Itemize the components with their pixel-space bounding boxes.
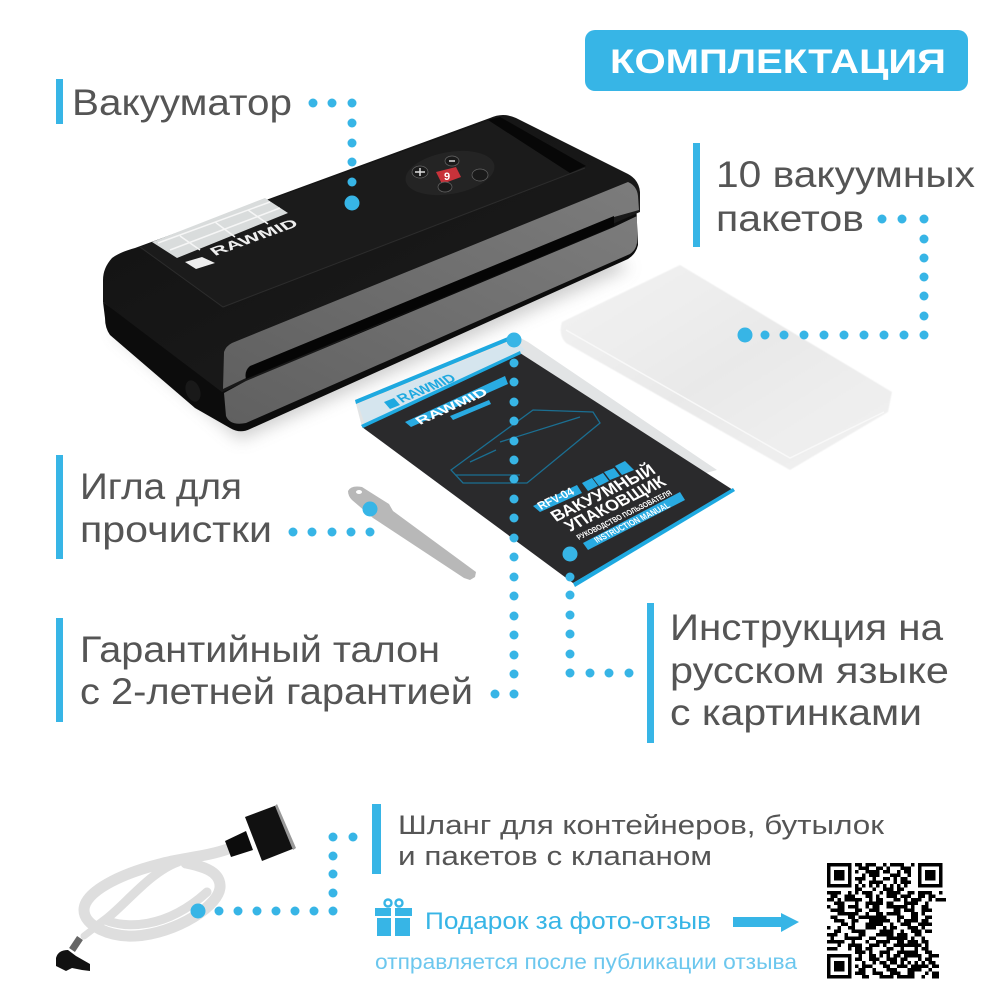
label: warranty: с 2-летней гарантией bbox=[80, 671, 473, 712]
dots: bags leader bbox=[738, 214, 928, 342]
label: manual: Инструкция на bbox=[670, 607, 943, 648]
manual tags bbox=[533, 461, 634, 512]
label: manual: с картинками bbox=[670, 692, 922, 733]
product image: vacuum sealer bbox=[103, 115, 640, 440]
label: needle bbox=[56, 455, 272, 559]
device lid bbox=[103, 115, 640, 392]
control panel bbox=[402, 145, 498, 201]
dots: needle leader bbox=[288, 502, 378, 536]
label: hose: и пакетов с клапаном bbox=[398, 841, 712, 871]
gift text: Подарок за фото-отзыв bbox=[425, 908, 711, 935]
label: hose bbox=[372, 804, 884, 874]
manual title bbox=[547, 461, 674, 542]
manual bar: INSTRUCTION MANUAL bbox=[592, 500, 672, 545]
manual logo bar: RAWMID bbox=[412, 385, 491, 427]
manual device outline bbox=[451, 410, 600, 483]
dots: hose leader bbox=[190, 832, 358, 918]
label: warranty: Гарантийный талон bbox=[80, 629, 440, 670]
label: warranty bbox=[56, 618, 473, 722]
manual title: РУКОВОДСТВО ПОЛЬЗОВАТЕЛЯ bbox=[575, 489, 674, 542]
product image: cleaning needle bbox=[348, 486, 476, 580]
label: bags bbox=[693, 143, 976, 247]
label: needle: Игла для bbox=[80, 466, 242, 507]
manual logo bar bbox=[405, 376, 508, 427]
warranty card logo: RAWMID bbox=[393, 371, 459, 405]
dots: vacuum sealer leader bbox=[308, 98, 360, 210]
label: manual bbox=[647, 603, 949, 743]
label: bags: 10 вакуумных bbox=[716, 154, 976, 195]
icon: gift bbox=[375, 900, 412, 936]
control panel: 9 bbox=[444, 171, 450, 183]
product image: hose bbox=[56, 804, 296, 971]
badge: title: КОМПЛЕКТАЦИЯ bbox=[610, 43, 946, 81]
device base bbox=[103, 200, 638, 431]
device logo bbox=[185, 216, 302, 269]
badge: title bbox=[585, 30, 968, 91]
gift note: отправляется после публикации отзыва bbox=[375, 951, 797, 974]
dots: warranty leader bbox=[490, 332, 522, 698]
arrow bbox=[733, 913, 799, 932]
manual title: УПАКОВЩИК bbox=[561, 472, 670, 535]
manual tags: RFV-04 bbox=[534, 485, 577, 512]
product image: warranty card and manual bbox=[355, 334, 735, 587]
label: bags: пакетов bbox=[716, 198, 864, 239]
product image: vacuum bags bbox=[561, 265, 892, 470]
label: needle: прочистки bbox=[80, 509, 272, 550]
QR code bbox=[827, 863, 946, 978]
device logo: RAWMID bbox=[206, 216, 302, 258]
label: manual: русском языке bbox=[670, 650, 949, 691]
label: vacuum sealer: Вакууматор bbox=[72, 82, 292, 123]
label: hose: Шланг для контейнеров, бутылок bbox=[398, 810, 884, 840]
manual title: ВАКУУМНЫЙ bbox=[547, 461, 659, 525]
device window bbox=[152, 198, 288, 258]
dots: manual leader bbox=[562, 546, 634, 678]
